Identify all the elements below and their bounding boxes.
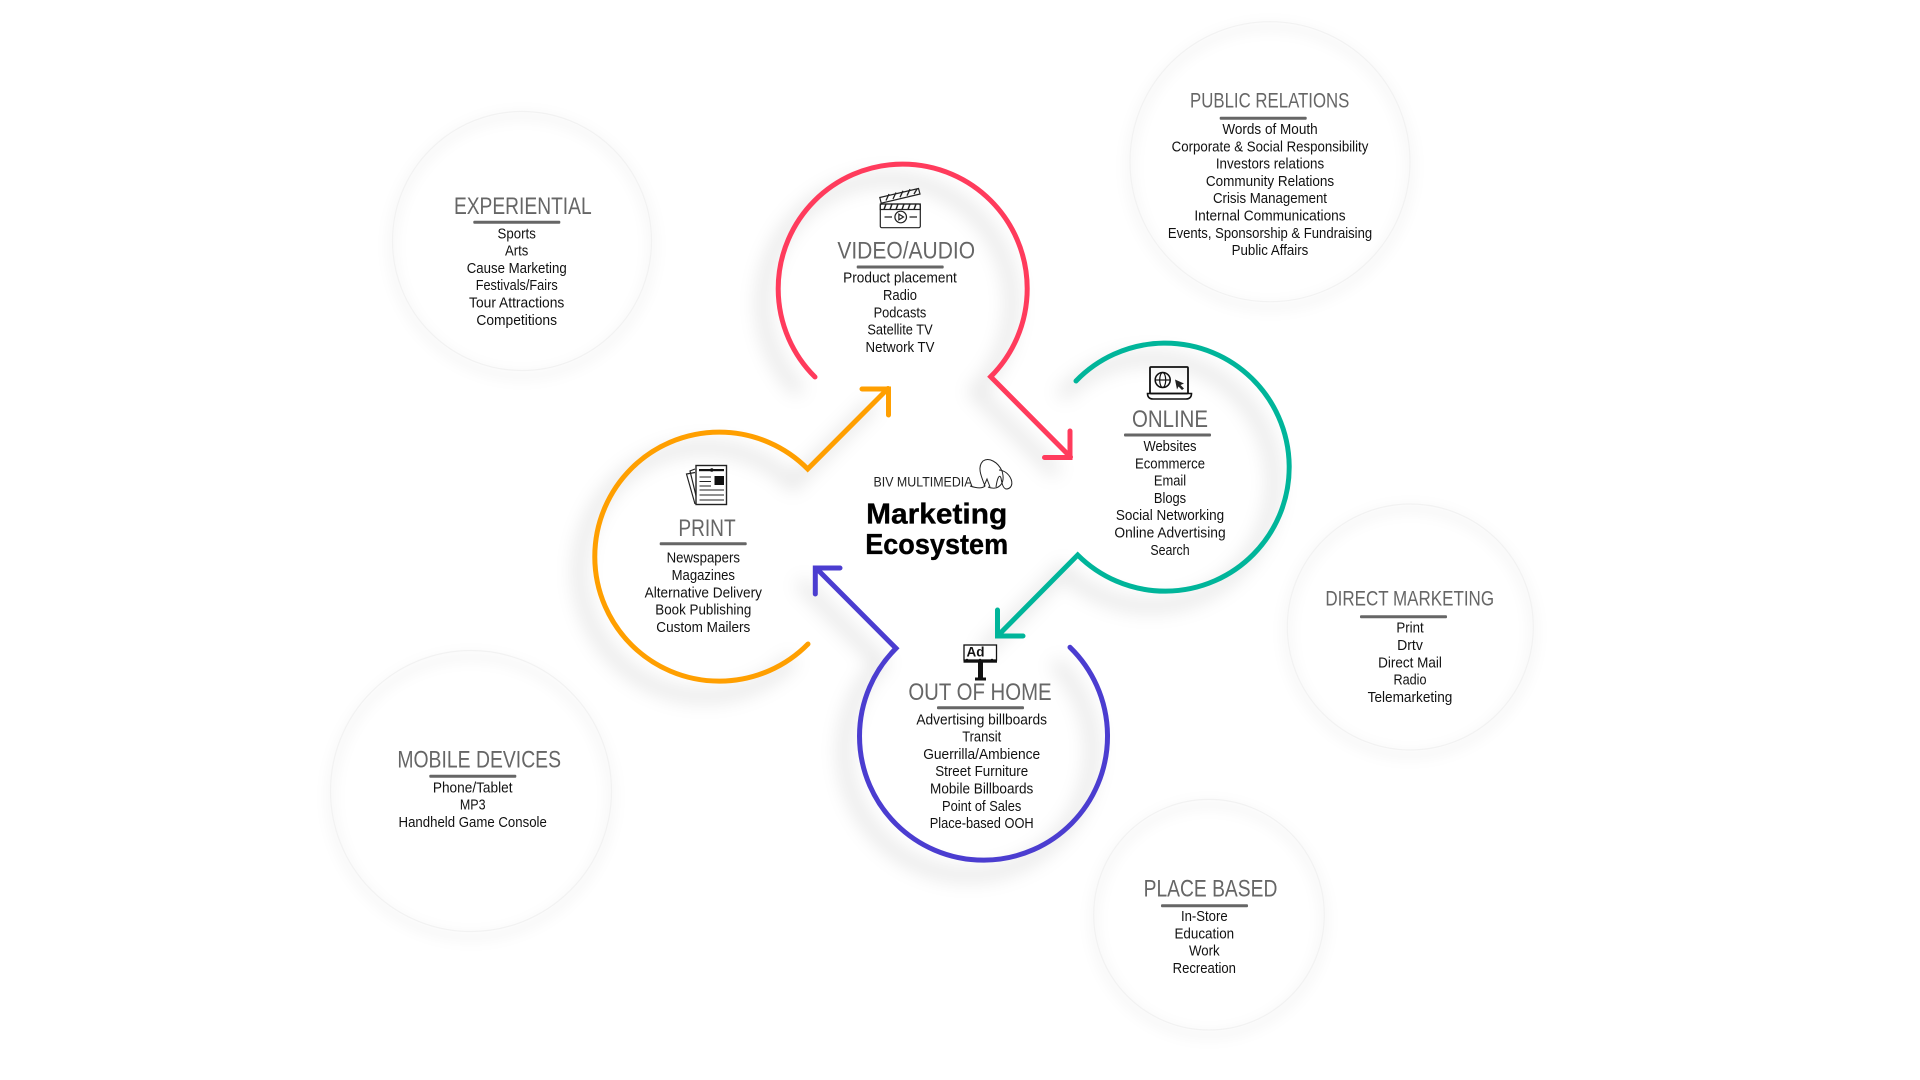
heading: place based: PLACE BASED	[1144, 876, 1277, 903]
center logo: BIV Multimedia: BIV MULTIMEDIA	[874, 475, 972, 490]
list: print items: Book Publishing	[655, 603, 751, 619]
list: place based items: Education	[1174, 926, 1234, 942]
list: print items: Magazines	[672, 568, 735, 584]
heading: print: PRINT	[678, 515, 736, 542]
heading: public relations: PUBLIC RELATIONS	[1190, 88, 1349, 112]
list: experiential items: Festivals/Fairs	[476, 278, 558, 294]
list: online items: Search	[1150, 543, 1190, 559]
title: Marketing Ecosystem: Marketing	[866, 498, 1007, 530]
list: mobile devices items: Phone/Tablet	[433, 780, 513, 796]
list: public relations items	[1168, 122, 1372, 259]
list: experiential items: Cause Marketing	[467, 261, 567, 277]
list: direct marketing items: Radio	[1394, 673, 1426, 689]
list: out of home items: Guerrilla/Ambience	[923, 747, 1040, 763]
list: video/audio items: Podcasts	[874, 305, 926, 321]
heading: mobile devices: MOBILE DEVICES	[397, 747, 561, 774]
title: Marketing Ecosystem	[865, 498, 1008, 561]
list: online items: Blogs	[1154, 491, 1186, 507]
list: online items	[1114, 439, 1226, 559]
list: print items: Newspapers	[667, 551, 740, 567]
list: public relations items: Community Relations	[1206, 174, 1334, 190]
list: online items: Websites	[1144, 439, 1196, 455]
heading: online: ONLINE	[1132, 406, 1208, 433]
icon: logo scribble	[970, 460, 1012, 489]
center logo: BIV Multimedia	[874, 460, 1012, 490]
panel: out of home	[815, 568, 1108, 860]
heading: direct marketing: DIRECT MARKETING	[1325, 587, 1494, 611]
list: video/audio items: Product placement	[843, 271, 957, 287]
icon: newspaper	[686, 466, 726, 504]
list: public relations items: Corporate & Social Responsibility	[1172, 139, 1369, 155]
list: video/audio items: Network TV	[866, 340, 935, 356]
list: print items	[645, 551, 763, 636]
panel: mobile devices	[330, 650, 612, 932]
list: out of home items: Place-based OOH	[930, 816, 1034, 832]
list: public relations items: Investors relations	[1216, 157, 1324, 173]
icon: clapperboard	[880, 188, 920, 228]
arrow ring: orange	[595, 388, 888, 681]
list: experiential items: Tour Attractions	[469, 296, 564, 312]
list: experiential items: Sports	[498, 226, 536, 242]
panel: video/audio	[778, 164, 1070, 458]
list: direct marketing items: Print	[1396, 621, 1424, 637]
list: experiential items	[467, 226, 567, 329]
arrow ring: teal	[998, 343, 1289, 636]
list: public relations items: Events, Sponsorship & Fundraising	[1168, 226, 1372, 242]
list: direct marketing items: Telemarketing	[1368, 690, 1452, 706]
title: Marketing Ecosystem: Ecosystem	[865, 529, 1008, 561]
list: experiential items: Competitions	[476, 313, 557, 329]
panel: experiential	[392, 112, 652, 370]
list: place based items: Work	[1189, 944, 1220, 960]
list: direct marketing items: Direct Mail	[1378, 655, 1442, 671]
panel: public relations	[1130, 22, 1410, 302]
list: online items: Email	[1154, 474, 1186, 490]
list: public relations items: Internal Communications	[1194, 208, 1346, 224]
list: mobile devices items: MP3	[460, 798, 486, 814]
list: direct marketing items: Drtv	[1397, 638, 1424, 654]
icon: billboard	[964, 644, 997, 680]
list: video/audio items	[843, 271, 957, 356]
list: experiential items: Arts	[505, 244, 528, 260]
list: public relations items: Public Affairs	[1232, 243, 1308, 259]
list: video/audio items: Radio	[883, 288, 917, 304]
panel: online	[998, 343, 1289, 636]
panel: print	[595, 388, 888, 681]
list: print items: Custom Mailers	[656, 620, 750, 636]
list: place based items: Recreation	[1173, 961, 1236, 977]
panel: place based	[1094, 799, 1324, 1030]
list: online items: Online Advertising	[1114, 526, 1226, 542]
heading: video/audio: VIDEO/AUDIO	[837, 237, 975, 264]
list: out of home items: Street Furniture	[935, 764, 1028, 780]
list: out of home items: Transit	[962, 730, 1001, 746]
list: online items: Ecommerce	[1135, 456, 1205, 472]
list: out of home items: Point of Sales	[942, 799, 1021, 815]
list: direct marketing items	[1368, 621, 1452, 706]
list: public relations items: Crisis Management	[1213, 191, 1327, 207]
list: video/audio items: Satellite TV	[867, 323, 933, 339]
heading: experiential: EXPERIENTIAL	[454, 193, 592, 220]
icon: laptop with globe	[1148, 367, 1192, 399]
list: print items: Alternative Delivery	[645, 585, 763, 601]
list: public relations items: Words of Mouth	[1222, 122, 1318, 138]
list: place based items: In-Store	[1181, 909, 1228, 925]
icon: billboard: Ad	[966, 644, 984, 660]
list: online items: Social Networking	[1116, 508, 1224, 524]
panel: direct marketing	[1287, 504, 1533, 750]
list: mobile devices items	[399, 780, 547, 831]
list: out of home items: Advertising billboards	[916, 712, 1047, 728]
list: out of home items	[916, 712, 1047, 832]
arrow ring: blue	[815, 568, 1108, 860]
arrow ring: red	[778, 164, 1070, 458]
list: place based items	[1173, 909, 1236, 977]
list: out of home items: Mobile Billboards	[930, 782, 1033, 798]
heading: out of home: OUT OF HOME	[908, 679, 1052, 706]
list: mobile devices items: Handheld Game Console	[399, 815, 547, 831]
